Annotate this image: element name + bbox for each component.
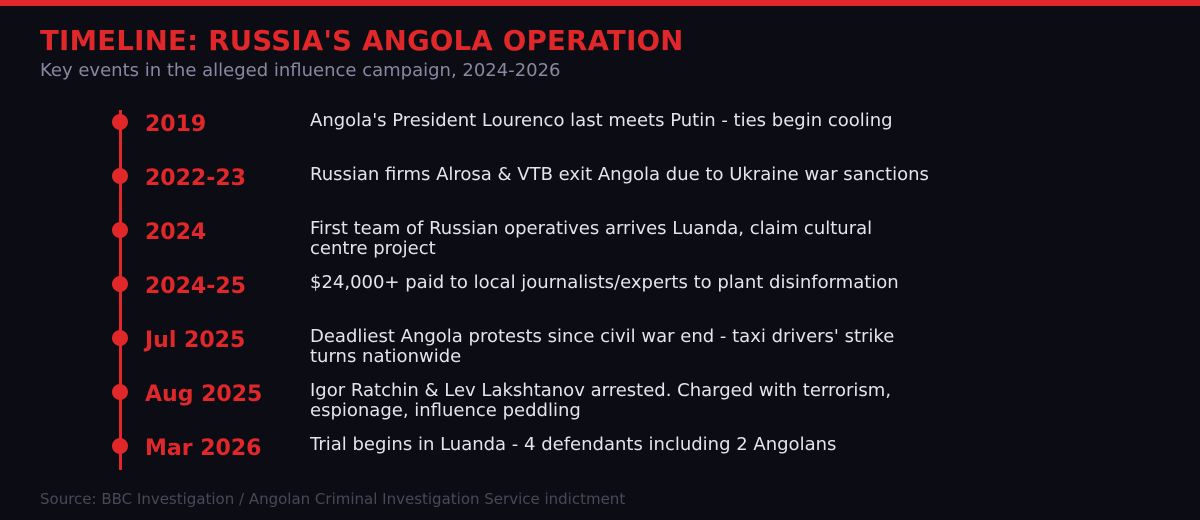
event Aug 2025 <box>112 380 891 421</box>
timeline: Trial begins in Luanda - 4 defendants including 2 Angolans <box>310 434 836 455</box>
timeline <box>112 110 929 470</box>
timeline: Jul 2025 <box>145 328 245 353</box>
timeline: Angola's President Lourenco last meets Putin - ties begin cooling <box>310 110 893 131</box>
subtitle: Key events in the alleged influence campaign, 2024-2026 <box>40 60 561 81</box>
timeline line <box>119 110 122 470</box>
timeline: 2022-23 <box>145 166 246 191</box>
timeline: centre project <box>310 238 436 259</box>
top accent bar <box>0 0 1200 6</box>
timeline: espionage, influence peddling <box>310 400 581 421</box>
timeline: $24,000+ paid to local journalists/experts to plant disinformation <box>310 272 899 293</box>
timeline: turns nationwide <box>310 346 461 367</box>
timeline: Aug 2025 <box>145 382 262 407</box>
event 2022-23 <box>112 164 929 191</box>
event Jul 2025 <box>112 326 894 367</box>
event Mar 2026 <box>112 434 836 461</box>
source: Source: BBC Investigation / Angolan Criminal Investigation Service indictment <box>40 490 625 508</box>
timeline: 2024-25 <box>145 274 246 299</box>
event 2024-25 <box>112 272 899 299</box>
timeline: 2019 <box>145 112 206 137</box>
event 2019 <box>112 110 893 137</box>
event 2024 <box>112 218 872 259</box>
title: TIMELINE: RUSSIA'S ANGOLA OPERATION <box>40 25 684 57</box>
timeline: Mar 2026 <box>145 436 261 461</box>
timeline: 2024 <box>145 220 206 245</box>
timeline: First team of Russian operatives arrives Luanda, claim cultural <box>310 218 872 239</box>
timeline: Igor Ratchin & Lev Lakshtanov arrested. Charged with terrorism, <box>310 380 891 401</box>
timeline: Deadliest Angola protests since civil war end - taxi drivers' strike <box>310 326 894 347</box>
timeline: Russian firms Alrosa & VTB exit Angola due to Ukraine war sanctions <box>310 164 929 185</box>
